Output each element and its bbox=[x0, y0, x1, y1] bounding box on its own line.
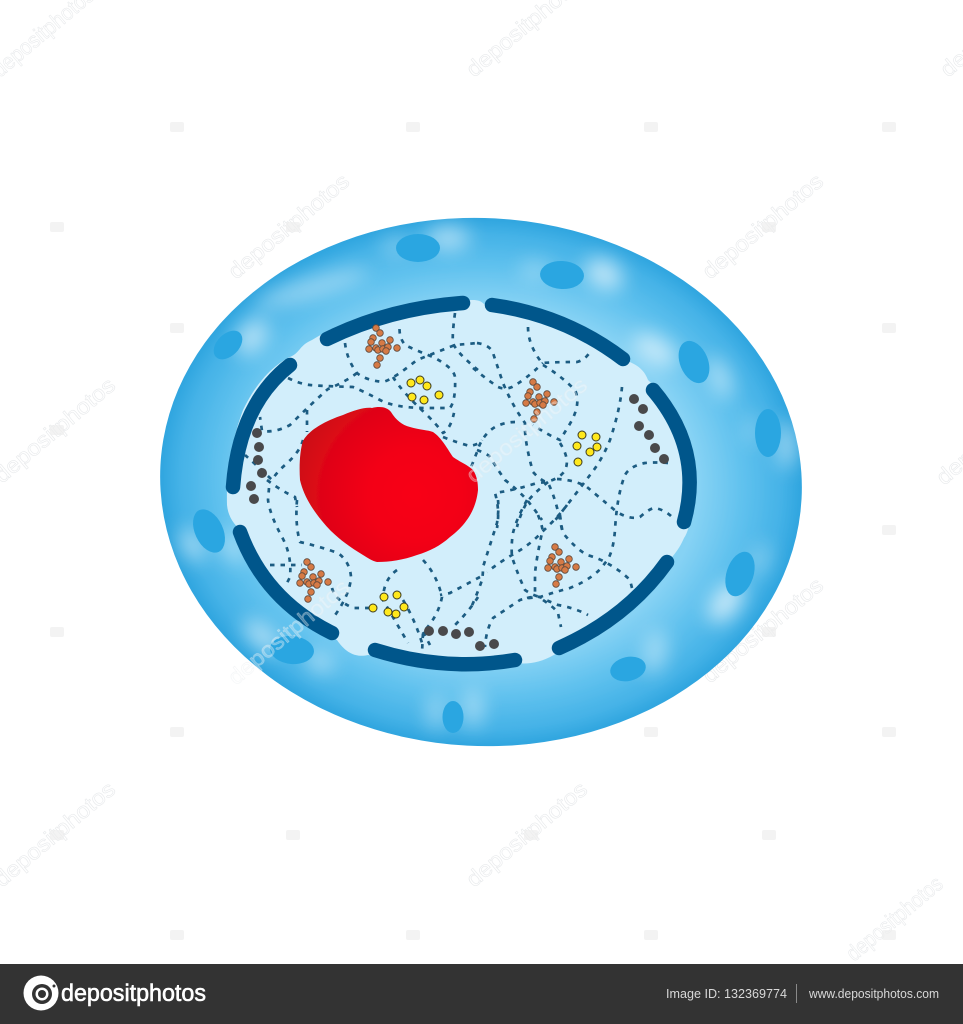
nucleolus bbox=[300, 407, 478, 562]
dark granules bbox=[246, 394, 669, 651]
watermark pattern: depositphotos bbox=[461, 776, 592, 892]
brown granule clusters bbox=[297, 325, 579, 602]
cell diagram bbox=[147, 202, 815, 762]
watermark text over cell: depositphotos bbox=[461, 372, 592, 488]
outer cytoplasm bbox=[147, 202, 815, 762]
footer bar bbox=[0, 964, 963, 1024]
yellow granule clusters bbox=[369, 376, 601, 618]
brand name: depositphotos bbox=[61, 980, 206, 1007]
nucleoplasm bbox=[227, 300, 692, 665]
watermark pattern: depositphotos bbox=[223, 168, 354, 284]
watermark pattern: depositphotos bbox=[697, 168, 828, 284]
watermark pattern: depositphotos bbox=[841, 871, 948, 966]
chromatin network bbox=[245, 313, 672, 653]
vacuoles bbox=[187, 234, 781, 733]
website: www.depositphotos.com bbox=[808, 986, 939, 1001]
watermark text over cell: depositphotos bbox=[223, 574, 354, 690]
nuclear membrane bbox=[233, 303, 690, 664]
icon: camera logo bbox=[24, 976, 58, 1010]
watermark text over cell bbox=[223, 372, 592, 690]
watermark camera marks bbox=[50, 122, 896, 940]
watermark pattern: depositphotos bbox=[697, 572, 828, 688]
image id: Image ID: 132369774 bbox=[666, 986, 787, 1001]
